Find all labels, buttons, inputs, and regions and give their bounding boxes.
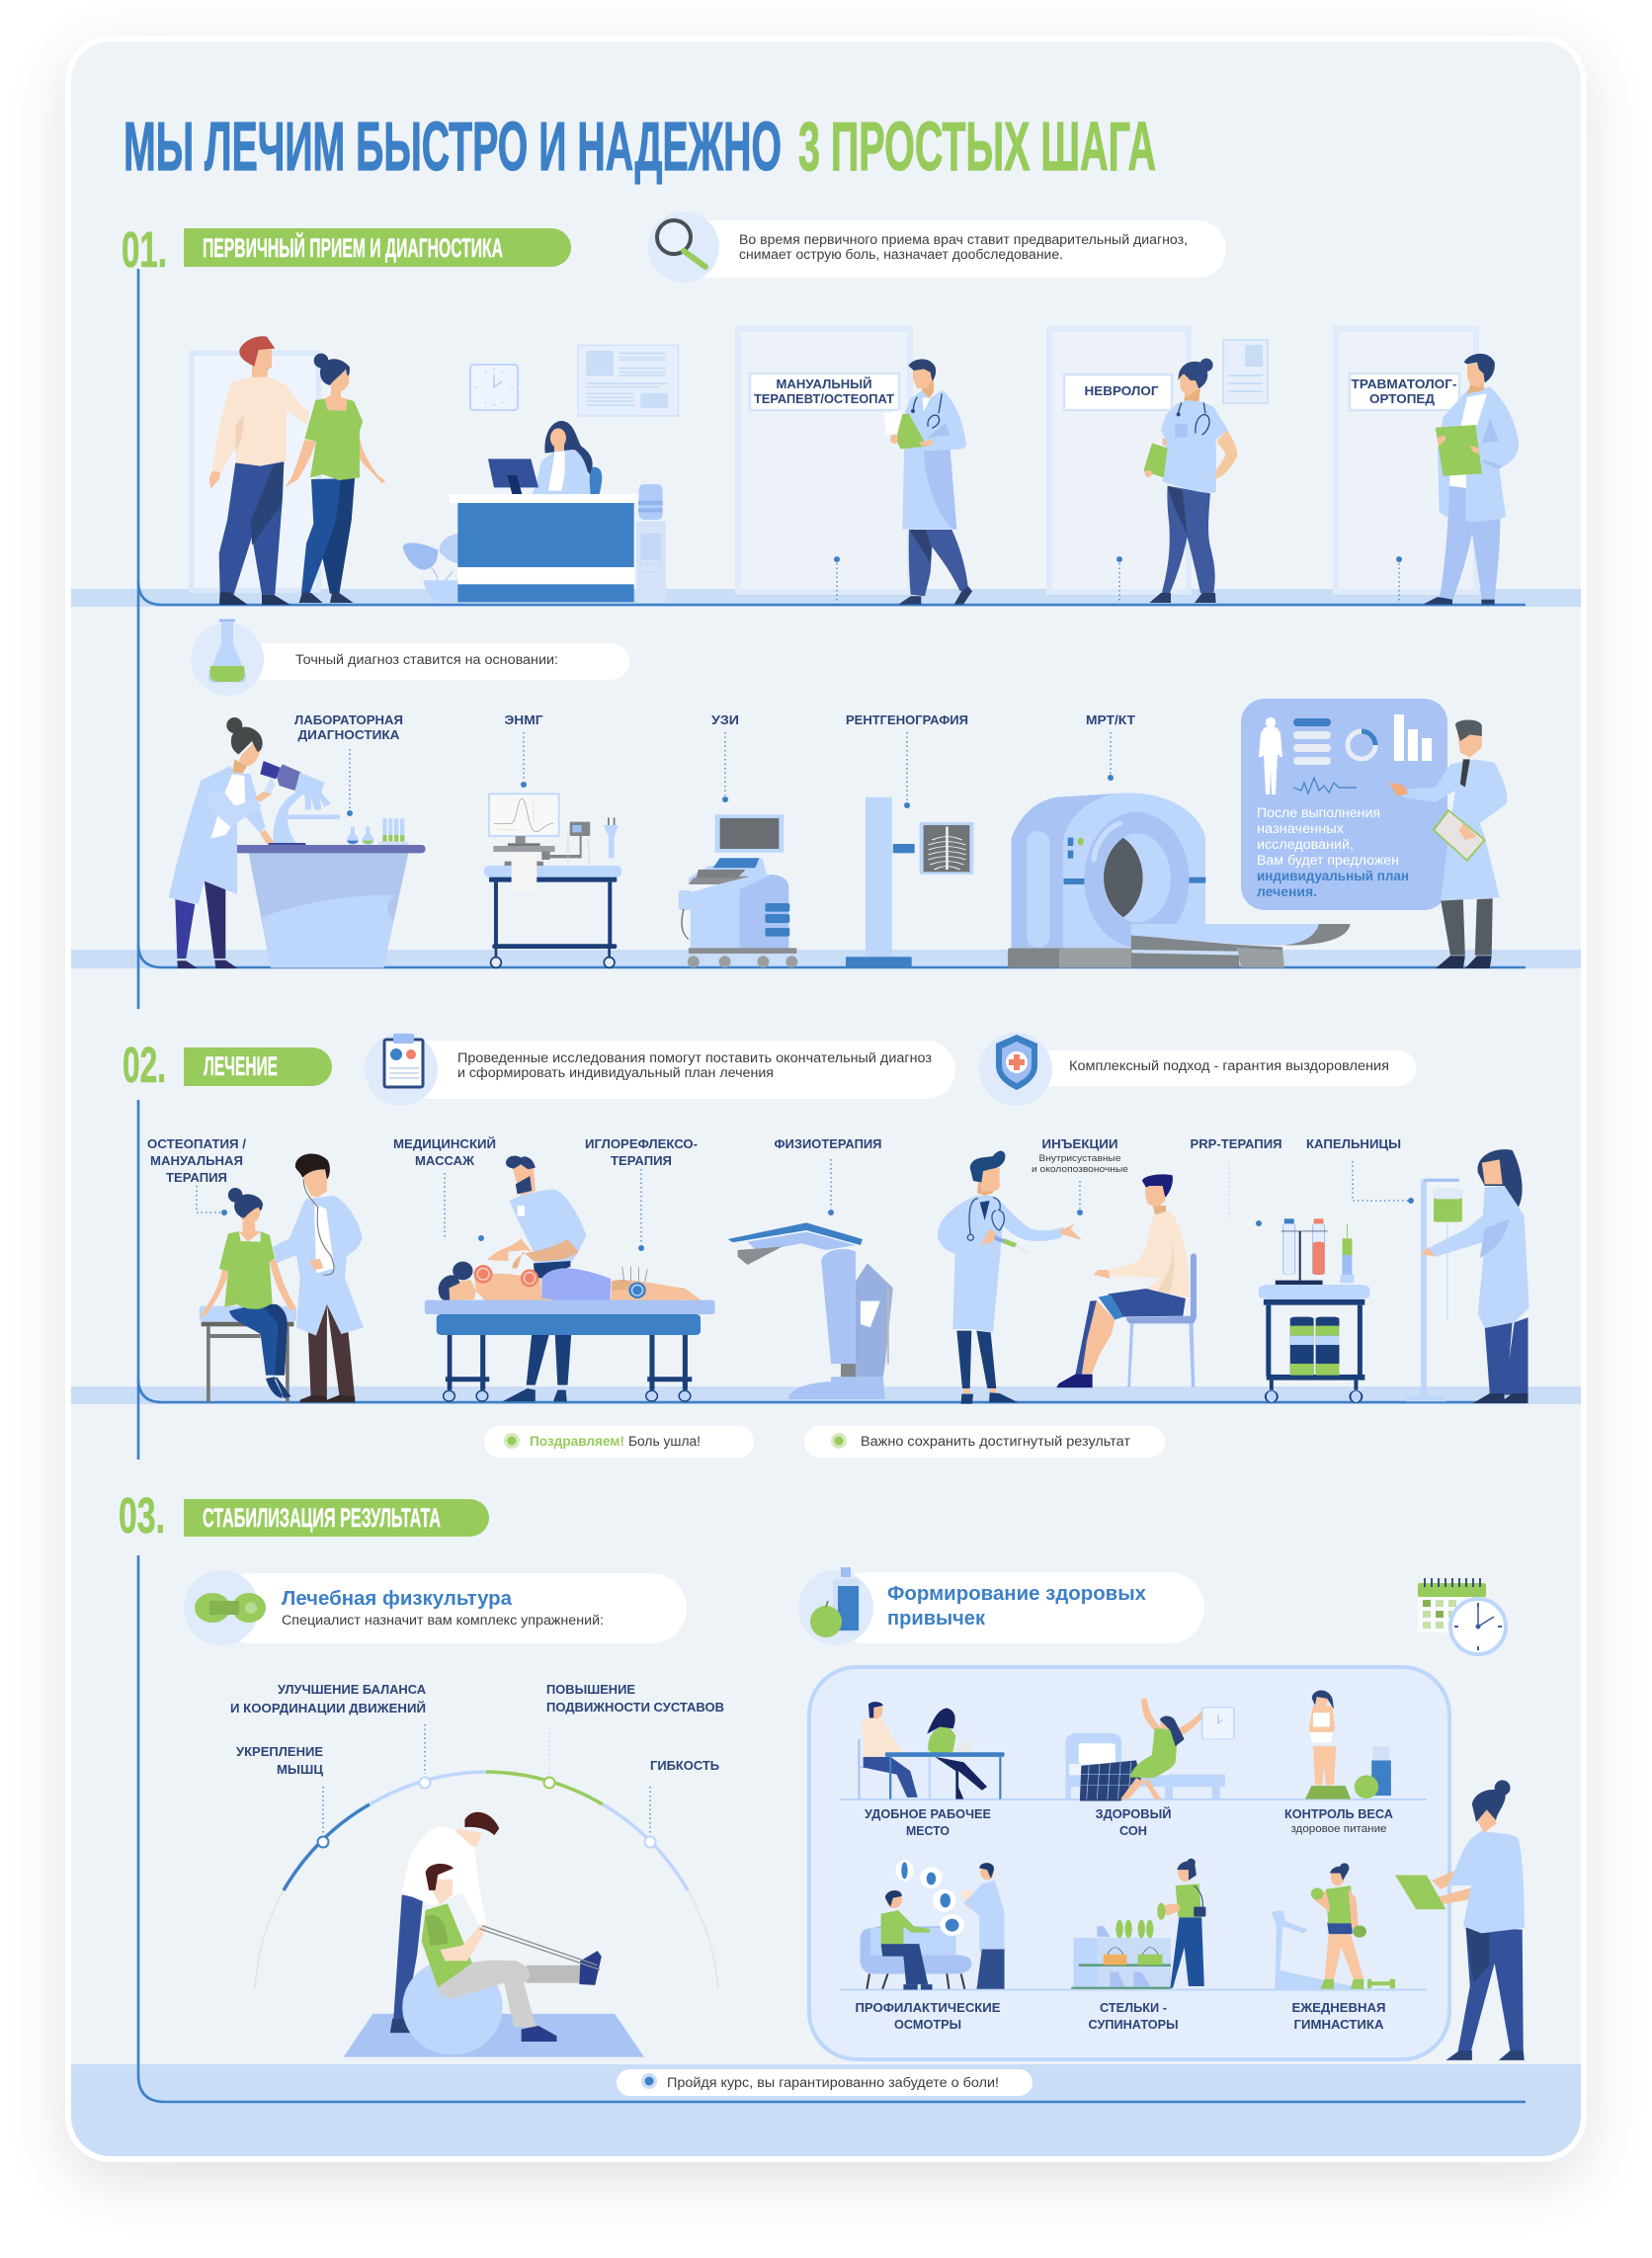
- callout: first visit: снимает острую боль, назначает дообследование.: [739, 247, 1063, 262]
- lab assistant: [169, 717, 275, 968]
- entrance door: [192, 353, 318, 590]
- stool: [200, 1306, 296, 1402]
- treatment labels: и околопозвоночные: [1032, 1164, 1128, 1175]
- habit labels: СУПИНАТОРЫ: [1089, 2017, 1178, 2032]
- section 02 heading: 02.: [123, 1037, 166, 1093]
- x-ray unit: [846, 797, 973, 968]
- arc labels: УКРЕПЛЕНИЕ: [236, 1744, 323, 1759]
- weight control: [1305, 1691, 1391, 1799]
- icon: clipboard: [384, 1034, 423, 1087]
- door: traumatologist: [1336, 329, 1476, 603]
- diagnostics labels: УЗИ: [711, 712, 739, 727]
- wall poster: [578, 345, 679, 416]
- icon: dumbbell: [195, 1593, 266, 1623]
- habit labels: [856, 1806, 1394, 2032]
- insoles shop: [1071, 1859, 1205, 1989]
- status pill: keep result: Важно сохранить достигнутый результат: [861, 1434, 1130, 1449]
- laboratory scene: [169, 717, 621, 968]
- arc labels: ПОВЫШЕНИЕ: [546, 1682, 635, 1697]
- arc labels: [230, 1682, 724, 1777]
- gym ball: [402, 1960, 503, 2054]
- massage therapist: [487, 1156, 586, 1401]
- lab flasks and tubes: [347, 818, 408, 845]
- diagnostics scene: [679, 797, 973, 968]
- callout: first visit: Во время первичного приема врач ставит предварительный диагноз,: [739, 232, 1188, 247]
- habit labels: ЕЖЕДНЕВНАЯ: [1292, 2000, 1385, 2015]
- section 03 heading: [119, 1487, 489, 1544]
- patient sitting: [200, 1188, 296, 1398]
- patient on ball: [422, 1864, 602, 2042]
- checkups: [860, 1860, 1005, 1990]
- callout: final diagnosis: [365, 1033, 955, 1106]
- IV drip stand: [1406, 1179, 1462, 1401]
- diagnostics labels: ДИАГНОСТИКА: [298, 727, 400, 742]
- habit labels: МЕСТО: [906, 1823, 950, 1838]
- pain points: [474, 1265, 647, 1298]
- panel: healthy habits: [809, 1667, 1449, 2059]
- osteopathy and massage scene: [200, 1153, 715, 1402]
- massage table: [444, 1335, 692, 1401]
- callout: healthy habits: Формирование здоровых: [887, 1583, 1146, 1605]
- nurse: [1143, 359, 1237, 603]
- MRI scanner: [1008, 793, 1351, 967]
- wall clock: [470, 365, 518, 410]
- callout: first visit: [648, 211, 1226, 283]
- callout: physical therapy: [184, 1570, 687, 1645]
- section 02 heading: [123, 1037, 332, 1093]
- habit labels: ЗДОРОВЫЙ: [1095, 1806, 1172, 1821]
- treatment labels: Внутрисуставные: [1039, 1153, 1120, 1164]
- healthy sleep: [1066, 1699, 1234, 1800]
- microscope: [260, 761, 340, 845]
- woman with clipboard: [1395, 1780, 1525, 2060]
- diagnostics labels: МРТ/КТ: [1086, 712, 1135, 727]
- callout: accurate diagnosis: Точный диагноз ставится на основании:: [295, 652, 558, 667]
- icon: flask: [208, 621, 246, 683]
- icon: shield: [996, 1035, 1037, 1090]
- panel text: После выполнения: [1257, 805, 1380, 820]
- habit labels: СОН: [1119, 1823, 1147, 1838]
- exercise scene: [344, 1812, 644, 2057]
- habit labels: СТЕЛЬКИ -: [1100, 2000, 1167, 2015]
- panel text: Вам будет предложен: [1257, 853, 1399, 868]
- workplace: [859, 1702, 1005, 1799]
- daily gym: [1272, 1863, 1395, 1990]
- habit illustrations: [859, 1691, 1525, 2060]
- door: manual therapist: [738, 329, 910, 603]
- water cooler: [636, 484, 666, 603]
- man: [209, 336, 309, 605]
- woman: [285, 354, 385, 603]
- status pill: pain gone: Поздравляем!: [530, 1434, 624, 1449]
- arc labels: ПОДВИЖНОСТИ СУСТАВОВ: [546, 1700, 724, 1714]
- treatment labels: ОСТЕОПАТИЯ /: [147, 1136, 246, 1151]
- final pill: [617, 2069, 1032, 2096]
- callout: accurate diagnosis: [191, 621, 629, 696]
- doctor with folder: [1423, 354, 1519, 605]
- icon: bottle and apple: [810, 1567, 860, 1637]
- section 01 heading: ПЕРВИЧНЫЙ ПРИЕМ И ДИАГНОСТИКА: [203, 232, 503, 263]
- table top: [425, 1300, 715, 1335]
- panel bars: [1293, 718, 1331, 765]
- doctor with clipboard: [884, 359, 972, 605]
- doctor with stethoscope: [273, 1153, 364, 1402]
- door: manual therapist: ТЕРАПЕВТ/ОСТЕОПАТ: [754, 391, 894, 406]
- treatment labels: ТЕРАПИЯ: [611, 1153, 672, 1168]
- treatment labels: КАПЕЛЬНИЦЫ: [1306, 1136, 1401, 1151]
- habit labels: ГИМНАСТИКА: [1294, 2017, 1384, 2032]
- panel text: [1257, 805, 1409, 899]
- treatment labels: МЕДИЦИНСКИЙ: [393, 1136, 496, 1151]
- diagnostics labels: ЭНМГ: [504, 712, 543, 727]
- callout: complex approach: Комплексный подход - гарантия выздоровления: [1069, 1058, 1389, 1073]
- callout: physical therapy: Лечебная физкультура: [282, 1588, 513, 1610]
- habit labels: ОСМОТРЫ: [894, 2017, 961, 2032]
- door: neurologist: [1049, 329, 1189, 603]
- treatment labels: ТЕРАПИЯ: [166, 1170, 227, 1185]
- habit labels: УДОБНОЕ РАБОЧЕЕ: [865, 1806, 991, 1821]
- donut chart: [1348, 731, 1375, 759]
- callout: healthy habits: [798, 1567, 1204, 1645]
- medical cart: [1259, 1285, 1369, 1402]
- title: МЫ ЛЕЧИМ БЫСТРО И НАДЕЖНО: [124, 108, 782, 185]
- callout: healthy habits: привычек: [887, 1608, 986, 1630]
- panel text: назначенных: [1257, 821, 1344, 836]
- treatment labels: МАНУАЛЬНАЯ: [150, 1153, 243, 1168]
- diagnostics labels: [294, 712, 1135, 816]
- trainer: [390, 1812, 499, 2033]
- section 03 heading: 03.: [119, 1487, 165, 1544]
- lab table: [234, 845, 426, 967]
- PRP tubes: [1276, 1218, 1354, 1285]
- title: 3 ПРОСТЫХ ШАГА: [798, 108, 1156, 185]
- section 02 heading: ЛЕЧЕНИЕ: [204, 1051, 278, 1081]
- section 01 heading: 01.: [122, 221, 167, 278]
- diagnostics labels: ЛАБОРАТОРНАЯ: [294, 712, 403, 727]
- callout: final diagnosis: Проведенные исследования помогут поставить окончательный диагноз: [457, 1050, 932, 1065]
- mat: [344, 2014, 644, 2057]
- door: traumatologist: ТРАВМАТОЛОГ-: [1352, 376, 1456, 391]
- doctors row B: [1423, 354, 1519, 605]
- reception scene: [192, 336, 679, 605]
- timeline lines: [138, 269, 1526, 2102]
- clipboard: [1434, 810, 1485, 861]
- diagnostics labels: РЕНТГЕНОГРАФИЯ: [846, 712, 968, 727]
- icon: magnifier: [657, 220, 705, 267]
- lying patient: [439, 1262, 704, 1306]
- physiotherapy apparatus: [728, 1222, 893, 1399]
- treatment labels: ИГЛОРЕФЛЕКСО-: [585, 1136, 698, 1151]
- habit labels: здоровое питание: [1290, 1823, 1387, 1835]
- doors and signs: [738, 329, 1476, 603]
- treatment labels: [147, 1136, 1414, 1251]
- injection doctor: [938, 1151, 1082, 1404]
- arc labels: МЫШЦ: [277, 1762, 324, 1777]
- final pill: Пройдя курс, вы гарантированно забудете о боли!: [667, 2075, 999, 2090]
- door: traumatologist: ОРТОПЕД: [1369, 391, 1436, 406]
- poster near neurologist: [1223, 340, 1268, 403]
- arc labels: И КООРДИНАЦИИ ДВИЖЕНИЙ: [230, 1701, 426, 1715]
- status pill: pain gone: [484, 1426, 754, 1458]
- habit labels: КОНТРОЛЬ ВЕСА: [1284, 1806, 1394, 1821]
- callout: physical therapy: Специалист назначит вам комплекс упражнений:: [282, 1613, 604, 1628]
- ECG line: [1293, 778, 1357, 794]
- arc labels: ГИБКОСТЬ: [650, 1758, 719, 1773]
- bar chart: [1394, 714, 1432, 761]
- door: neurologist: НЕВРОЛОГ: [1085, 383, 1159, 398]
- seated patient: [1056, 1174, 1197, 1387]
- nurse at drip: [1421, 1149, 1529, 1403]
- callout: final diagnosis: и сформировать индивидуальный план лечения: [457, 1065, 774, 1080]
- injection scene: [938, 1151, 1197, 1404]
- icon: human figure: [1259, 717, 1282, 794]
- treatment labels: МАССАЖ: [415, 1153, 474, 1168]
- results panel: [1241, 699, 1447, 910]
- arc chart: [255, 1724, 718, 1989]
- panel text: исследований,: [1257, 837, 1354, 852]
- receptionist: [532, 421, 602, 494]
- status pill: keep result: [804, 1426, 1165, 1458]
- treatment scene right: [728, 1149, 1529, 1403]
- arc labels: УЛУЧШЕНИЕ БАЛАНСА: [278, 1682, 427, 1697]
- doctors row A: [884, 359, 1237, 605]
- treatment labels: ФИЗИОТЕРАПИЯ: [775, 1136, 881, 1151]
- icon: calendar and clock: [1418, 1578, 1506, 1654]
- floor bands: [71, 589, 1581, 2156]
- habit labels: ПРОФИЛАКТИЧЕСКИЕ: [856, 2000, 1001, 2015]
- monitor: [488, 459, 538, 494]
- ultrasound machine: [679, 814, 797, 967]
- reception desk: [450, 494, 638, 602]
- callout: complex approach: [979, 1033, 1416, 1106]
- status pill: pain gone: Боль ушла!: [628, 1434, 701, 1449]
- section 01 heading: [122, 221, 571, 278]
- panel text: лечения.: [1257, 884, 1317, 899]
- panel text: индивидуальный план: [1257, 869, 1409, 883]
- treatment labels: PRP-ТЕРАПИЯ: [1190, 1136, 1282, 1151]
- ENMG machine: [484, 794, 621, 967]
- door: manual therapist: МАНУАЛЬНЫЙ: [777, 376, 871, 391]
- doctor at panel: [1389, 720, 1508, 968]
- treatment labels: ИНЪЕКЦИИ: [1041, 1136, 1118, 1151]
- section 03 heading: СТАБИЛИЗАЦИЯ РЕЗУЛЬТАТА: [203, 1503, 441, 1533]
- plant: [403, 534, 457, 602]
